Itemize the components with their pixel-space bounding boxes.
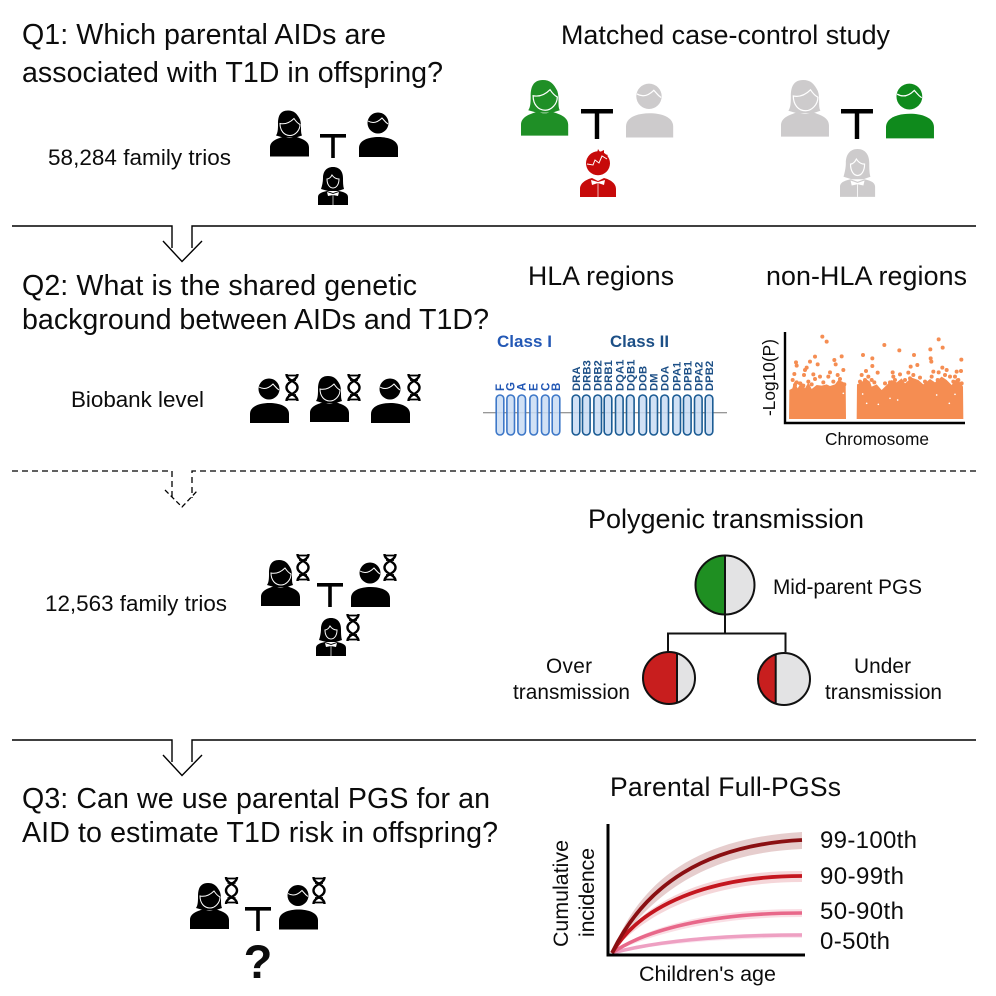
icon: control family with green father and grey child	[781, 80, 934, 197]
label: mid-parent PGS: Mid-parent PGS	[773, 576, 922, 599]
class II gene labels: DOA	[660, 366, 672, 391]
class II gene labels: DRB2	[593, 360, 605, 391]
label: class II: Class II	[610, 332, 669, 351]
icon: parents with DNA and unknown child	[190, 877, 325, 988]
class II gene labels: DRA	[571, 367, 583, 391]
section: Q3 heading: Q3: Can we use parental PGS for an	[22, 783, 490, 815]
class II gene labels: DQA1	[614, 360, 626, 391]
section: Q2 heading: Q2: What is the shared genetic	[22, 270, 417, 302]
class I gene pills	[496, 395, 560, 435]
class II gene labels: DPB1	[682, 361, 694, 391]
class I gene labels: G	[506, 382, 518, 391]
y axis label: Cumulative	[549, 840, 573, 947]
label: under transmission	[825, 655, 942, 704]
class II gene labels: DPA2	[693, 362, 705, 391]
class II gene labels: DPB2	[704, 361, 716, 391]
curve: 0-50th	[612, 935, 802, 953]
section: Q1 heading: associated with T1D in offspring?	[22, 57, 443, 89]
chart: HLA gene map	[483, 332, 727, 435]
class II gene pills	[572, 395, 713, 435]
class II gene labels	[571, 360, 716, 391]
class II gene labels: DRB3	[581, 360, 593, 391]
heading: matched case-control study: Matched case-control study	[561, 20, 891, 50]
x axis label: Chromosome	[825, 429, 929, 449]
class II gene labels: DM	[649, 373, 661, 391]
confidence bands	[612, 832, 802, 953]
circle: mid-parent	[696, 556, 754, 614]
scatter points	[789, 335, 964, 419]
icon: family trio with DNA	[261, 554, 396, 656]
class I gene labels: E	[529, 383, 541, 391]
icon: family trio black	[270, 110, 398, 205]
y axis label: incidence	[575, 848, 599, 937]
curve: 90-99th	[612, 876, 802, 953]
text: 58,284 family trios: 58,284 family trios	[48, 145, 231, 170]
heading: HLA regions: HLA regions	[528, 261, 674, 291]
class I gene labels: C	[540, 383, 552, 391]
axes	[608, 824, 805, 955]
class I gene labels: B	[551, 383, 563, 391]
question mark: ?	[244, 935, 272, 988]
section: Q1 heading: Q1: Which parental AIDs are	[22, 19, 386, 51]
text: 12,563 family trios: 12,563 family trios	[45, 591, 227, 616]
section: Q1 heading	[22, 19, 443, 89]
chart: Manhattan plot	[759, 332, 965, 449]
section: Q3 heading	[22, 783, 498, 849]
class II gene labels: DQB1	[625, 360, 637, 391]
arrow: solid from polygenic section to Q3	[12, 740, 976, 776]
legend labels: 90-99th	[820, 863, 904, 890]
icon: case family with green mother and red child	[521, 80, 673, 197]
label: class I: Class I	[497, 332, 552, 351]
class II gene labels: DOB	[638, 366, 650, 391]
legend labels: 50-90th	[820, 898, 904, 925]
class II gene labels: DPA1	[672, 362, 684, 391]
curve: 99-100th	[612, 840, 802, 953]
label: over transmission: Over	[546, 655, 592, 678]
label: over transmission: transmission	[513, 681, 630, 704]
legend labels: 0-50th	[820, 928, 890, 955]
arrow: solid from Q1 to Q2	[12, 226, 976, 262]
arrow: dashed from Q2 to polygenic section	[12, 471, 976, 507]
icon: three people with DNA	[250, 374, 420, 423]
circle: over transmission	[643, 652, 695, 704]
axes	[785, 332, 965, 423]
text: biobank level: Biobank level	[71, 387, 204, 412]
diagram: polygenic transmission tree	[513, 556, 942, 705]
class I gene labels: A	[517, 383, 529, 391]
circle: under transmission	[758, 653, 810, 705]
curve: 50-90th	[612, 913, 802, 953]
heading: non-HLA regions: non-HLA regions	[766, 261, 967, 291]
y axis label	[549, 840, 599, 947]
heading: polygenic transmission: Polygenic transmission	[588, 504, 864, 534]
legend labels	[820, 827, 917, 955]
label: under transmission: Under	[854, 655, 911, 678]
class I gene labels	[495, 382, 563, 391]
section: Q2 heading: background between AIDs and T1D?	[22, 304, 489, 336]
label: over transmission	[513, 655, 630, 704]
chart: cumulative incidence curves	[549, 824, 917, 986]
legend labels: 99-100th	[820, 827, 917, 854]
heading: parental full-PGSs: Parental Full-PGSs	[610, 772, 841, 802]
class I gene labels: F	[495, 384, 507, 391]
y axis label: -Log10(P)	[759, 339, 779, 416]
label: under transmission: transmission	[825, 681, 942, 704]
section: Q2 heading	[22, 270, 489, 336]
x axis label: Children's age	[639, 962, 776, 986]
class II gene labels: DRB1	[603, 360, 615, 391]
section: Q3 heading: AID to estimate T1D risk in offspring?	[22, 817, 498, 849]
